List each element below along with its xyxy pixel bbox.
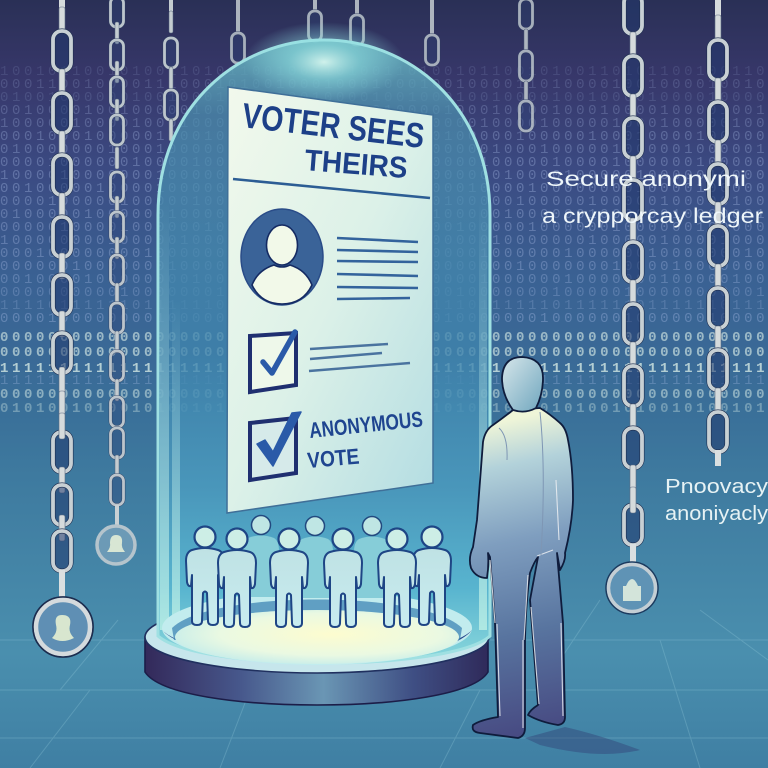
ballot title: VOTER SEES: [240, 96, 426, 156]
chain second with lock pendant: [97, 0, 135, 564]
binary code background: 1001011001010011010110010011010011010010110010100110101100100110: [0, 64, 768, 80]
binary code background: 0010000100000000100000000100000001000000100000010000000100000100: [0, 272, 768, 288]
binary code background: 0010000010000100000000100000100001000001000010000000010000100000: [0, 181, 768, 197]
binary code background: 1111011111101111110111111011111101111110111111011111101111110111: [0, 298, 768, 314]
anonymous vote label: VOTE: [306, 444, 360, 473]
binary code background: 0100000001000100000100000100010000010000010001000001000001000001: [0, 142, 768, 158]
binary code background: [0, 64, 768, 417]
binary code background: 0100000100000010000000100000010000001000001000000100000010000001: [0, 207, 768, 223]
checkbox one lines: [309, 344, 410, 371]
binary code background: 0001000000001000000100000010000000010000100000010000001000000010: [0, 246, 768, 262]
binary code background: 1000010000000100000100010000100000100000001000010000010000010000: [0, 168, 768, 184]
binary code background: 1000001000010001000001000100001000100000100001000001000100000100: [0, 116, 768, 132]
side text: secure ledger: [542, 168, 763, 228]
chain left with lock pendant: [33, 0, 93, 657]
binary code background: 0001100100001110001010010001000100010010000110100001001000010010: [0, 77, 768, 93]
binary code background: 1111111111111111111111111111111111111111111111111111111111111111: [0, 361, 768, 377]
binary code background: 0010000100100000100100001000010010000100010000100010000100001001: [0, 103, 768, 119]
binary code background: 0000000000100000001000010000000100000010000000100000100000000001: [0, 285, 768, 301]
binary code background: 0000000000000000000000000000000000000000000000000000000000000000: [0, 387, 768, 403]
man body: [470, 408, 573, 738]
binary code background: 0001000100000100010000010001000001000100000100000100010000100000: [0, 129, 768, 145]
back row voters: [243, 516, 390, 598]
ballot title: THEIRS: [303, 144, 409, 185]
checkbox two: [250, 412, 301, 480]
crowd of voters: [186, 516, 451, 627]
front row voters: [186, 526, 451, 627]
binary code background: 0000100000000100000010000000001000000100000001000000100000010000: [0, 311, 768, 327]
binary code background: 0000010000100000010000001000000100000010000010000001000000100000: [0, 220, 768, 236]
binary code background: 1000000001000001000010000000100000100000010000000100000100001000: [0, 233, 768, 249]
floor shadow: [525, 727, 640, 754]
checkbox one: [250, 332, 296, 392]
ballot title: [240, 96, 426, 185]
side text: secure ledger: Secure anonymi: [546, 168, 746, 191]
voter detail lines: [337, 238, 418, 299]
anonymous vote label: ANONYMOUS: [308, 406, 424, 443]
binary code background: 0000100000100000100100000010000010000100000100000100000100000100: [0, 194, 768, 210]
binary code background: 0000001000000010000000100000100000100000000100000001000010000000: [0, 259, 768, 275]
inner floor of dome: [162, 591, 472, 665]
side text: secure ledger: a crypporcay ledger: [542, 205, 763, 228]
binary code background: 0000000000000000000000000000000000000000000000000000000000000000: [0, 330, 768, 346]
man head: [502, 357, 543, 412]
anonymous vote label: [306, 406, 424, 473]
chain far right: [709, 0, 727, 466]
man highlights: [490, 480, 563, 728]
voter avatar: [241, 209, 323, 305]
chain right with lock pendant: [606, 0, 658, 614]
binary code background: 1111111111111111111111111111111111111111111111111111111111111111: [0, 373, 768, 389]
pedestal base: [145, 601, 489, 705]
side text: privacy: [665, 476, 768, 525]
side text: privacy: Pnoovacy: [665, 476, 768, 498]
binary code background: 0000000000000000000000000000000000000000000000000000000000000000: [0, 345, 768, 361]
short top chains: [232, 0, 532, 131]
chain behind dome, left: [164, 0, 178, 141]
man viewing the dome: [470, 357, 640, 754]
binary code background: 0101001010010100101001010010100101001010010100101001010010100101: [0, 401, 768, 417]
binary code background: 0100100000010010001001000010000100100010010000100100001000010000: [0, 90, 768, 106]
binary code background: 0000100000010000100000100000001000010000100000100001000000100000: [0, 155, 768, 171]
ballot paper: [227, 87, 433, 513]
floor grid: [0, 600, 768, 768]
side text: privacy: anoniyacly: [665, 503, 768, 525]
glass dome: [158, 22, 490, 663]
